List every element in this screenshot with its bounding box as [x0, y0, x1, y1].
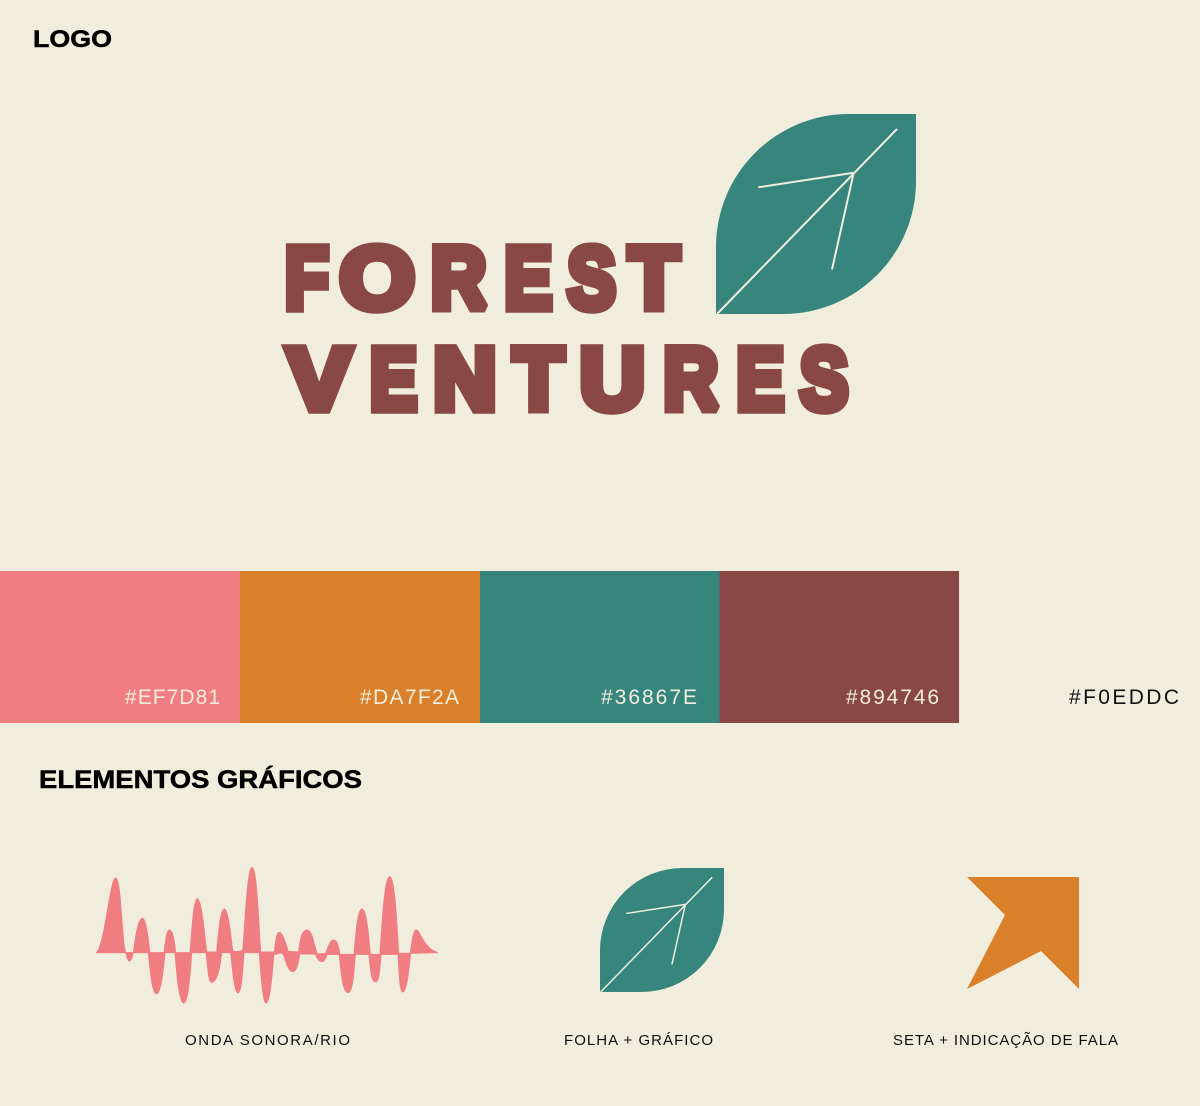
logo wordmark: F: [285, 229, 329, 327]
graphic: sound wave / river: [96, 867, 438, 1003]
logo wordmark: R: [664, 331, 718, 428]
swatch: teal: #36867E: [601, 686, 697, 709]
swatch: teal: [480, 571, 720, 723]
swatch: brown: #894746: [846, 686, 939, 709]
logo: forest ventures: [285, 114, 916, 428]
swatch: brown: [720, 571, 959, 723]
logo wordmark: T: [514, 331, 563, 428]
logo wordmark: E: [370, 330, 417, 428]
icon: large leaf: [716, 114, 916, 314]
caption: wave: ONDA SONORA/RIO: [185, 1032, 350, 1049]
heading: logo: LOGO: [33, 26, 112, 53]
caption: leaf: FOLHA + GRÁFICO: [564, 1032, 713, 1049]
colour palette: [0, 571, 1179, 723]
graphic: small leaf: [600, 868, 724, 992]
swatch: orange: #DA7F2A: [360, 686, 459, 709]
logo wordmark: N: [434, 331, 496, 428]
logo wordmark: [285, 229, 848, 428]
logo wordmark: S: [568, 230, 616, 326]
logo wordmark: E: [504, 229, 552, 327]
swatch: pink: #EF7D81: [125, 686, 220, 709]
logo wordmark: S: [800, 331, 848, 427]
swatch: orange: [240, 571, 480, 723]
logo wordmark: U: [580, 330, 645, 428]
swatch: pink: [0, 571, 240, 723]
logo wordmark: O: [340, 230, 414, 327]
swatch label: cream: #F0EDDC: [1069, 686, 1179, 709]
logo wordmark: V: [288, 332, 351, 428]
logo wordmark: T: [629, 230, 679, 327]
caption: arrow: SETA + INDICAÇÃO DE FALA: [893, 1032, 1118, 1049]
logo wordmark: R: [431, 230, 486, 327]
graphic: arrow speech mark: [967, 877, 1079, 989]
logo wordmark: E: [736, 330, 784, 428]
heading: graphic elements: ELEMENTOS GRÁFICOS: [39, 765, 362, 794]
